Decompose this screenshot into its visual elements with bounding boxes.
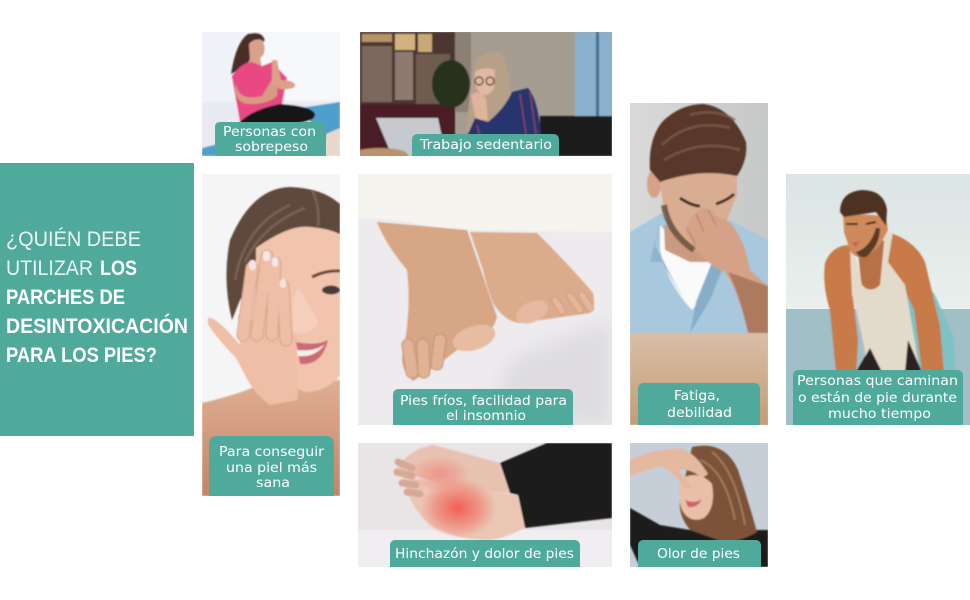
- panel: pies fríos, insomnio: [358, 174, 612, 425]
- label: personas que caminan o están de pie mucho tiempo: Personas que caminan: [797, 373, 958, 389]
- heading text: LOS: [100, 257, 137, 280]
- label: hinchazón y dolor de pies: Hinchazón y dolor de pies: [395, 546, 574, 562]
- panel: olor de pies: [630, 443, 768, 567]
- label: personas con sobrepeso: Personas con: [223, 124, 316, 140]
- label: personas que caminan o están de pie mucho tiempo: mucho tiempo: [828, 406, 931, 422]
- label: personas con sobrepeso: sobrepeso: [235, 139, 308, 155]
- label: personas que caminan o están de pie mucho tiempo: [793, 370, 963, 425]
- label: trabajo sedentario: Trabajo sedentario: [419, 137, 552, 153]
- label: para conseguir una piel más sana: Para conseguir: [219, 444, 324, 460]
- label: trabajo sedentario: [412, 134, 559, 156]
- label: olor de pies: Olor de pies: [657, 546, 740, 562]
- icon: hand covering eye: [208, 251, 298, 405]
- label: para conseguir una piel más sana: una piel más: [226, 460, 317, 476]
- label: fatiga, debilidad: debilidad: [667, 405, 732, 421]
- label: personas que caminan o están de pie mucho tiempo: o están de pie durante: [798, 390, 957, 406]
- label: fatiga, debilidad: [638, 383, 760, 425]
- panel: personas que caminan o están de pie: [786, 174, 970, 425]
- panel: question heading block: [0, 163, 194, 436]
- heading text: PARA LOS PIES?: [6, 344, 157, 367]
- label: pies fríos, facilidad para el insomnio: Pies fríos, facilidad para: [400, 393, 567, 409]
- heading text: UTILIZAR: [6, 257, 93, 280]
- heading text: [6, 228, 188, 367]
- label: fatiga, debilidad: Fatiga,: [674, 388, 720, 404]
- label: personas con sobrepeso: [215, 122, 326, 156]
- label: pies fríos, facilidad para el insomnio: el insomnio: [446, 408, 526, 424]
- heading text: ¿QUIÉN DEBE: [6, 228, 141, 251]
- label: hinchazón y dolor de pies: [390, 540, 580, 567]
- panel: fatiga, debilidad: [630, 103, 768, 425]
- panel: piel más sana: [202, 174, 340, 496]
- label: pies fríos, facilidad para el insomnio: [393, 389, 573, 425]
- label: para conseguir una piel más sana: [209, 436, 334, 496]
- panel: personas con sobrepeso: [202, 32, 340, 156]
- heading text: DESINTOXICACIÓN: [6, 314, 188, 338]
- label: para conseguir una piel más sana: sana: [256, 475, 290, 491]
- panel: hinchazón y dolor de pies: [358, 443, 612, 567]
- heading text: PARCHES DE: [6, 286, 125, 309]
- panel: trabajo sedentario: [352, 32, 612, 162]
